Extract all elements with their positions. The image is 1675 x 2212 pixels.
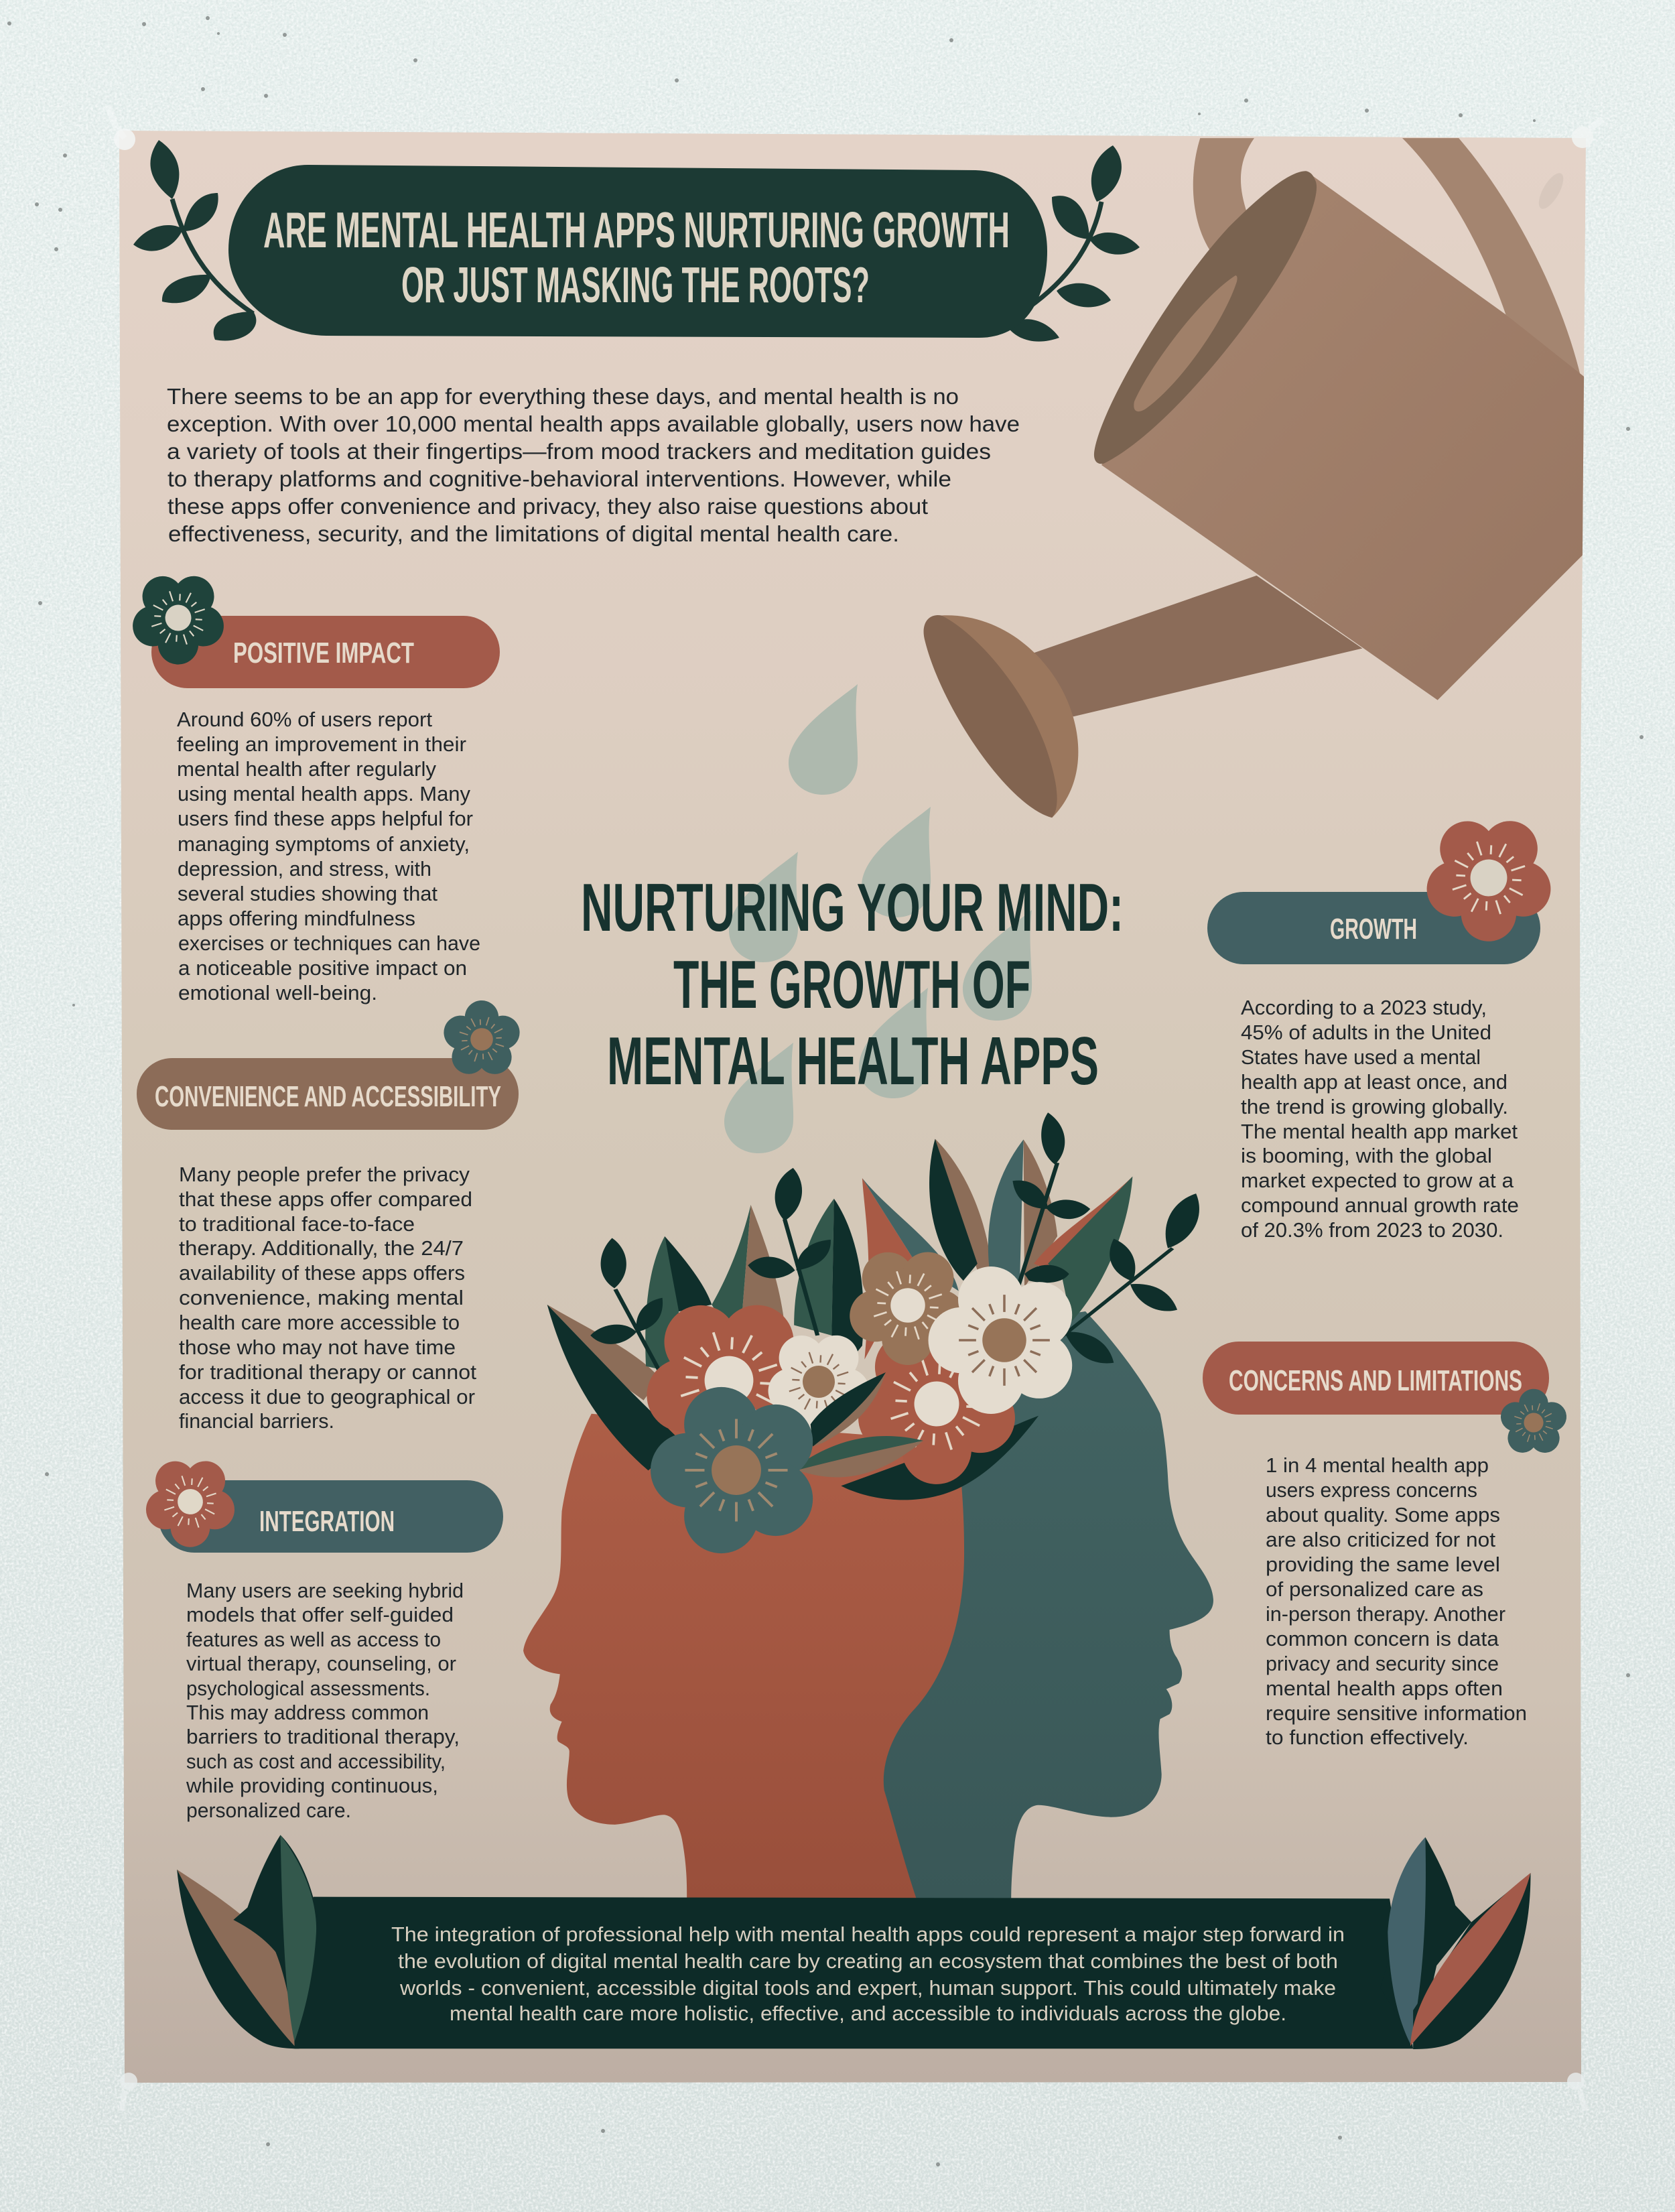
flower: white large bbox=[929, 1266, 1072, 1414]
footer text: mental health care more holistic, effective, and accessible to individuals across the globe. bbox=[450, 2002, 1286, 2025]
body text: health care more accessible to bbox=[179, 1311, 460, 1334]
intro text: these apps offer convenience and privacy, they also raise questions about bbox=[168, 494, 928, 519]
heading pill bbox=[137, 1058, 519, 1130]
body text: features as well as access to bbox=[186, 1628, 441, 1651]
heading pill bbox=[1203, 1342, 1549, 1415]
intro text: a variety of tools at their fingertips—from mood trackers and meditation guides bbox=[167, 439, 991, 464]
body text: psychological assessments. bbox=[186, 1677, 430, 1700]
footer text bbox=[391, 1923, 1345, 2025]
poster sheet bbox=[119, 131, 1586, 2083]
body text: privacy and security since bbox=[1266, 1652, 1499, 1675]
heading pill: CONVENIENCE AND ACCESSIBILITY bbox=[155, 1080, 501, 1113]
title banner: OR JUST MASKING THE ROOTS? bbox=[401, 257, 870, 313]
body text: Many people prefer the privacy bbox=[179, 1163, 470, 1186]
body text: that these apps offer compared bbox=[179, 1187, 472, 1211]
footer text: worlds - convenient, accessible digital tools and expert, human support. This could ultimately make bbox=[399, 1976, 1336, 2000]
body text: compound annual growth rate bbox=[1241, 1193, 1519, 1217]
body text: mental health after regularly bbox=[177, 757, 436, 781]
body text: models that offer self-guided bbox=[186, 1603, 454, 1626]
heading pill: INTEGRATION bbox=[259, 1505, 395, 1538]
crown leaves front bbox=[789, 1372, 923, 1478]
body text: of 20.3% from 2023 to 2030. bbox=[1241, 1218, 1503, 1242]
body text: of personalized care as bbox=[1266, 1577, 1483, 1601]
panel: concerns and limitations bbox=[1203, 1342, 1572, 1749]
body text: using mental health apps. Many bbox=[178, 782, 470, 805]
body text: The mental health app market bbox=[1241, 1120, 1518, 1143]
flower: white small bbox=[754, 1319, 878, 1445]
footer text: the evolution of digital mental health care by creating an ecosystem that combines the best of both bbox=[398, 1949, 1338, 1973]
icon: red flower bbox=[133, 1447, 243, 1558]
panel: growth bbox=[1207, 801, 1562, 1242]
flower: red lower bbox=[836, 1307, 1029, 1503]
body text: virtual therapy, counseling, or bbox=[186, 1652, 456, 1675]
body text: users express concerns bbox=[1266, 1478, 1477, 1502]
water drops bbox=[724, 684, 1032, 1153]
panel: integration bbox=[133, 1447, 503, 1822]
body text: to function effectively. bbox=[1266, 1726, 1469, 1749]
body text: are also criticized for not bbox=[1266, 1528, 1495, 1551]
central heading: NURTURING YOUR MIND: bbox=[581, 870, 1124, 946]
title banner bbox=[228, 165, 1047, 338]
body text: This may address common bbox=[186, 1701, 429, 1724]
flower crown bbox=[547, 1112, 1199, 1553]
intro text bbox=[167, 384, 1020, 546]
body text: emotional well-being. bbox=[178, 981, 377, 1004]
body text: Many users are seeking hybrid bbox=[186, 1579, 464, 1602]
body text: while providing continuous, bbox=[186, 1774, 438, 1797]
body text: depression, and stress, with bbox=[178, 857, 431, 881]
body text: managing symptoms of anxiety, bbox=[178, 832, 470, 856]
body text: those who may not have time bbox=[179, 1336, 456, 1359]
blue head silhouette bbox=[838, 1311, 1213, 1898]
body text: is booming, with the global bbox=[1241, 1144, 1492, 1167]
flower: teal large bbox=[651, 1387, 813, 1553]
body text: require sensitive information bbox=[1266, 1701, 1527, 1725]
body text: personalized care. bbox=[186, 1799, 351, 1822]
body text bbox=[177, 708, 480, 1004]
heading pill: CONCERNS AND LIMITATIONS bbox=[1229, 1364, 1522, 1397]
body text: mental health apps often bbox=[1266, 1677, 1503, 1700]
body text: According to a 2023 study, bbox=[1241, 996, 1487, 1019]
intro text: There seems to be an app for everything these days, and mental health is no bbox=[167, 384, 959, 409]
body text: therapy. Additionally, the 24/7 bbox=[179, 1236, 464, 1260]
laurel right bbox=[1007, 145, 1140, 342]
icon: teal flower bbox=[1491, 1381, 1572, 1463]
body text: such as cost and accessibility, bbox=[186, 1750, 446, 1773]
body text bbox=[1266, 1453, 1527, 1749]
icon: red flower bbox=[1409, 801, 1562, 956]
footer band and leaves bbox=[177, 1835, 1531, 2049]
body text: users find these apps helpful for bbox=[178, 807, 473, 830]
body text bbox=[1241, 996, 1519, 1242]
body text: financial barriers. bbox=[179, 1409, 334, 1433]
body text: the trend is growing globally. bbox=[1241, 1095, 1508, 1118]
intro text: exception. With over 10,000 mental health apps available globally, users now have bbox=[167, 411, 1020, 436]
panel: convenience and accessibility bbox=[137, 991, 527, 1433]
crown leaves back bbox=[547, 1112, 1199, 1500]
body text: providing the same level bbox=[1266, 1553, 1500, 1576]
body text: access it due to geographical or bbox=[179, 1385, 475, 1409]
body text: availability of these apps offers bbox=[179, 1261, 465, 1285]
body text: convenience, making mental bbox=[179, 1286, 464, 1309]
central heading bbox=[581, 870, 1124, 1099]
body text: in-person therapy. Another bbox=[1266, 1602, 1505, 1626]
body text: common concern is data bbox=[1266, 1627, 1499, 1650]
body text: health app at least once, and bbox=[1241, 1070, 1508, 1094]
panel: positive impact bbox=[120, 562, 500, 1004]
body text bbox=[179, 1163, 476, 1433]
body text: market expected to grow at a bbox=[1241, 1169, 1514, 1192]
laurel left bbox=[133, 140, 256, 341]
body text bbox=[186, 1579, 464, 1822]
red head silhouette bbox=[523, 1414, 964, 1898]
footer text: The integration of professional help with mental health apps could represent a major step forward in bbox=[391, 1923, 1345, 1946]
intro text: to therapy platforms and cognitive-behavioral interventions. However, while bbox=[168, 466, 951, 491]
body text: exercises or techniques can have bbox=[178, 931, 480, 955]
body text: States have used a mental bbox=[1241, 1045, 1481, 1069]
body text: Around 60% of users report bbox=[177, 708, 432, 731]
icon: dark flower bbox=[120, 562, 232, 675]
heading pill: POSITIVE IMPACT bbox=[233, 637, 414, 669]
body text: 45% of adults in the United bbox=[1241, 1021, 1491, 1044]
intro text: effectiveness, security, and the limitations of digital mental health care. bbox=[168, 521, 899, 546]
heading pill bbox=[151, 616, 500, 688]
watering can bbox=[924, 138, 1586, 818]
heading pill: GROWTH bbox=[1330, 913, 1417, 946]
flower: brown bbox=[833, 1234, 976, 1379]
heading pill bbox=[158, 1480, 503, 1553]
central heading: MENTAL HEALTH APPS bbox=[607, 1024, 1099, 1099]
body text: to traditional face-to-face bbox=[179, 1212, 415, 1236]
body text: about quality. Some apps bbox=[1266, 1503, 1500, 1526]
flower: red large bbox=[623, 1279, 826, 1484]
central heading: THE GROWTH OF bbox=[673, 948, 1030, 1023]
title banner: ARE MENTAL HEALTH APPS NURTURING GROWTH bbox=[263, 202, 1010, 258]
body text: several studies showing that bbox=[178, 882, 438, 905]
body text: apps offering mindfulness bbox=[178, 907, 415, 930]
body text: barriers to traditional therapy, bbox=[186, 1725, 460, 1748]
body text: a noticeable positive impact on bbox=[178, 956, 467, 980]
icon: teal flower bbox=[433, 991, 527, 1086]
heading pill bbox=[1207, 892, 1540, 964]
body text: for traditional therapy or cannot bbox=[179, 1360, 476, 1384]
body text: 1 in 4 mental health app bbox=[1266, 1453, 1489, 1477]
footer banner bbox=[177, 1835, 1531, 2049]
body text: feeling an improvement in their bbox=[177, 732, 466, 756]
